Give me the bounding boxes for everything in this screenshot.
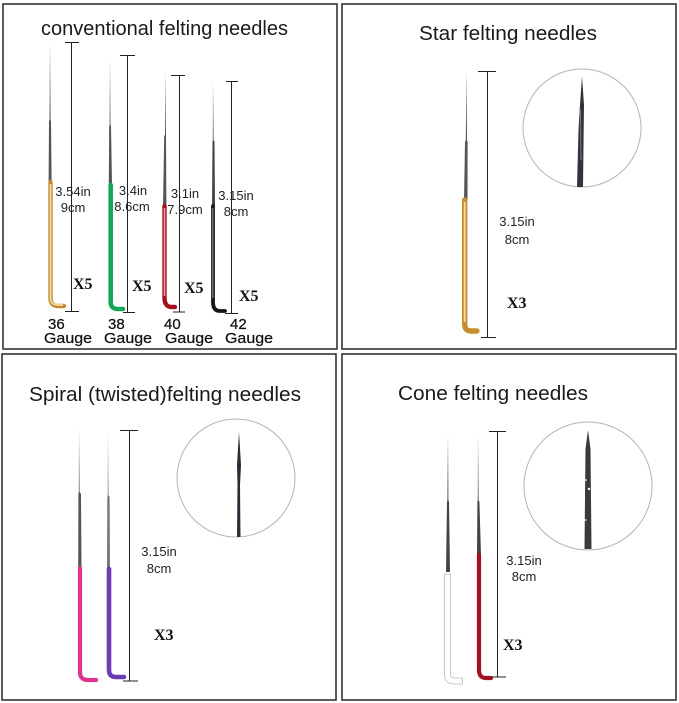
- label: 3.15in 8cm: 8cm: [224, 204, 248, 219]
- dimension line: 3.15in: [478, 72, 496, 338]
- dimension line: 3.15in: [489, 432, 506, 677]
- needle: white: [444, 434, 462, 684]
- label: 40 Gauge: 40: [164, 316, 181, 333]
- label: 3.15in 8cm: 8cm: [147, 561, 171, 576]
- label: 3.54in 9cm: 9cm: [61, 200, 85, 215]
- needle: pink: [78, 429, 96, 680]
- label: 42 Gauge: 42: [230, 316, 247, 333]
- panel: Star felting needles: [342, 4, 676, 349]
- quantity: X5: X5: [184, 280, 204, 297]
- magnified needle circle: [177, 419, 295, 537]
- dimension line: 3.15in: [120, 430, 138, 681]
- needle: 42 gauge black: [212, 82, 225, 311]
- heading: Cone felting needles: Cone felting needles: [398, 383, 588, 405]
- label: 3.15in 8cm: 3.15in: [141, 544, 177, 559]
- magnified needle circle: [523, 69, 641, 187]
- label: 3.1in 7.9cm: 3.1in: [171, 186, 199, 201]
- panel: Spiral (twisted) felting needles: [2, 354, 336, 700]
- label: 3.15in 8cm: 3.15in: [499, 214, 535, 229]
- dimension line: 3.1in: [171, 76, 185, 312]
- label: 3.15in 8cm: 8cm: [512, 569, 536, 584]
- quantity: X5: X5: [132, 278, 152, 295]
- quantity: X5: X5: [73, 276, 93, 293]
- panel: conventional felting needles: [3, 4, 337, 349]
- needle: 40 gauge red: [163, 72, 175, 307]
- dimension line: 3.4in: [120, 56, 135, 312]
- quantity: X3: X3: [503, 637, 523, 654]
- heading: conventional felting needles: conventional felting needles: [41, 18, 288, 40]
- needle: red: [477, 435, 491, 678]
- label: 3.54in 9cm: 3.54in: [55, 184, 91, 199]
- label: 36 Gauge: 36: [48, 316, 65, 333]
- label: 38 Gauge: Gauge: [104, 330, 152, 347]
- label: 36 Gauge: Gauge: [44, 330, 92, 347]
- heading: Star felting needles: Star felting needles: [419, 23, 597, 45]
- needle: purple: [107, 432, 124, 677]
- label: 3.4in 8.6cm: 3.4in: [119, 183, 147, 198]
- heading: Spiral (twisted) felting needles: Spiral (twisted)felting needles: [29, 384, 301, 406]
- needle: star gold: [464, 70, 477, 331]
- label: 3.15in 8cm: 3.15in: [506, 553, 542, 568]
- magnified needle circle: [524, 422, 652, 550]
- quantity: X3: X3: [507, 295, 527, 312]
- label: 38 Gauge: 38: [108, 316, 125, 333]
- label: 3.15in 8cm: 8cm: [505, 232, 529, 247]
- label: 40 Gauge: Gauge: [165, 330, 213, 347]
- label: 3.4in 8.6cm: 8.6cm: [114, 199, 150, 214]
- label: 42 Gauge: Gauge: [225, 330, 273, 347]
- needle: 36 gauge gold: [49, 43, 64, 306]
- dimension line: 3.15in: [225, 82, 238, 314]
- quantity: X5: X5: [239, 288, 259, 305]
- label: 3.15in 8cm: 3.15in: [218, 188, 254, 203]
- panel: Cone felting needles: [342, 354, 676, 700]
- quantity: X3: X3: [154, 627, 174, 644]
- label: 3.1in 7.9cm: 7.9cm: [167, 202, 203, 217]
- needle: 38 gauge green: [109, 60, 123, 309]
- dimension line: 3.54in: [65, 42, 79, 312]
